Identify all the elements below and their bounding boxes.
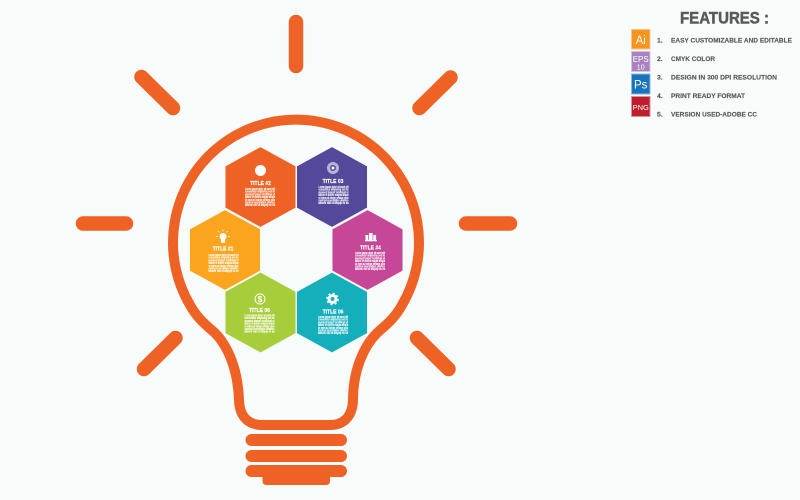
text block: title 6 teal: nostrud exercitation ullamco	[318, 328, 348, 332]
text block: title 3: nostrud exercitation ullamco	[318, 198, 348, 202]
text block: title 6 teal: eiusmod tempor incididunt ut	[318, 320, 349, 324]
text block: title 6 teal	[318, 315, 349, 335]
text block: title 4: Lorem ipsum dolor sit amet elit	[355, 251, 386, 255]
hexagon: title 3	[296, 146, 368, 228]
icon: Ai badge: Ai	[636, 35, 646, 47]
icon: Ps badge	[632, 74, 650, 94]
hexagon: title 6 teal	[296, 272, 368, 353]
heading: title 6 teal: TITLE 06	[323, 310, 344, 316]
item 5: VERSION USED-ADOBE CC	[671, 112, 757, 118]
text block: title 3: ut enim ad minim veniam quis	[318, 196, 349, 200]
icon: PNG badge	[632, 96, 650, 116]
hexagon: title 4	[332, 210, 403, 290]
text block: title 2: eiusmod tempor incididunt ut	[245, 192, 276, 196]
icon: Ai badge	[632, 30, 650, 49]
text block: title 6 green: ut enim ad minim veniam quis	[244, 324, 275, 328]
text block: title 3: laboris nisi ut aliquip ex ea	[318, 201, 349, 205]
item 2: CMYK COLOR	[671, 56, 715, 63]
text block: title 6 green: eiusmod tempor incididunt ut	[244, 319, 275, 323]
heading: title 1: TITLE #1	[213, 246, 234, 252]
text block: title 4	[355, 251, 386, 271]
text block: title 2: consectetur adipiscing sed do	[245, 190, 275, 194]
icon: clock	[255, 165, 266, 176]
text block: title 3: Lorem ipsum dolor sit amet elit	[318, 185, 349, 189]
text block: title 1: nostrud exercitation ullamco	[208, 266, 238, 270]
text block: title 1: laboris nisi ut aliquip ex ea	[208, 269, 239, 273]
text block: title 6 green: nostrud exercitation ullamco	[244, 327, 274, 331]
text block: title 6 teal: laboris nisi ut aliquip ex ea	[318, 331, 348, 335]
item 3: 3.	[657, 74, 663, 82]
text block: title 6 green: laboris nisi ut aliquip ex ea	[244, 330, 275, 334]
text block: title 3: consectetur adipiscing sed do	[318, 188, 348, 192]
hexagon: title 1	[190, 210, 260, 290]
icon: EPS badge: 10	[637, 64, 645, 72]
text block: title 3: labore et dolore magna aliqua	[318, 193, 349, 197]
icon: light bulb	[216, 230, 230, 243]
item 4: PRINT READY FORMAT	[671, 93, 746, 100]
icon: Ps badge: Ps	[634, 80, 648, 92]
features list	[657, 38, 792, 118]
text block: title 6 teal: consectetur adipiscing sed do	[318, 318, 348, 322]
light bulb outline	[173, 120, 419, 425]
text block: title 4: consectetur adipiscing sed do	[355, 254, 385, 258]
text block: title 2: laboris nisi ut aliquip ex ea	[245, 203, 275, 207]
heading: title 6 green: TITLE 06	[249, 308, 270, 314]
item 5: 5.	[657, 112, 663, 118]
item 4: 4.	[657, 93, 663, 100]
text block: title 2: nostrud exercitation ullamco	[245, 200, 275, 204]
text block: title 3	[318, 185, 349, 205]
item 1: EASY CUSTOMIZABLE AND EDITABLE	[671, 38, 792, 44]
icon: PNG badge: PNG	[633, 103, 649, 112]
text block: title 1: eiusmod tempor incididunt ut	[208, 258, 239, 262]
hexagon: title 2	[225, 146, 296, 228]
features heading: FEATURES :	[680, 10, 769, 28]
icon: bar chart	[365, 233, 377, 241]
text block: title 1	[208, 253, 239, 273]
heading: title 4: TITLE #4	[360, 246, 381, 252]
text block: title 6 teal: labore et dolore magna aliqua	[318, 323, 348, 327]
item 2: 2.	[657, 56, 663, 63]
icon: dollar coin: $	[258, 295, 263, 304]
text block: title 6 green: consectetur adipiscing sed do	[244, 316, 274, 320]
text block: title 6 teal: ut enim ad minim veniam quis	[318, 326, 348, 330]
heading: title 2: TITLE #2	[250, 181, 271, 187]
text block: title 1: consectetur adipiscing sed do	[208, 256, 238, 260]
icon: EPS badge	[632, 52, 650, 72]
text block: title 6 green: labore et dolore magna aliqua	[244, 322, 275, 326]
text block: title 6 green: Lorem ipsum dolor sit amet elit	[244, 314, 275, 318]
text block: title 4: labore et dolore magna aliqua	[355, 259, 385, 263]
text block: title 2: Lorem ipsum dolor sit amet elit	[245, 187, 276, 191]
item 3: DESIGN IN 300 DPI RESOLUTION	[671, 74, 777, 82]
text block: title 4: eiusmod tempor incididunt ut	[355, 256, 386, 260]
text block: title 4: laboris nisi ut aliquip ex ea	[355, 267, 385, 271]
text block: title 2: ut enim ad minim veniam quis	[245, 198, 275, 202]
text block: title 4: nostrud exercitation ullamco	[355, 264, 385, 268]
heading: title 3: TITLE 03	[323, 179, 344, 185]
text block: title 1: labore et dolore magna aliqua	[208, 261, 239, 265]
text block: title 2: labore et dolore magna aliqua	[245, 195, 275, 199]
text block: title 1: Lorem ipsum dolor sit amet elit	[208, 253, 239, 257]
text block: title 6 green	[244, 314, 275, 334]
icon: EPS badge: EPS	[633, 55, 649, 64]
text block: title 2	[245, 187, 276, 207]
text block: title 6 teal: Lorem ipsum dolor sit amet elit	[318, 315, 349, 319]
hexagon: title 6 green	[225, 272, 296, 353]
text block: title 1: ut enim ad minim veniam quis	[208, 264, 239, 268]
text block: title 3: eiusmod tempor incididunt ut	[318, 190, 349, 194]
bulb screw base	[246, 434, 347, 485]
text block: title 4: ut enim ad minim veniam quis	[355, 262, 385, 266]
icon: gear	[327, 293, 338, 305]
item 1: 1.	[657, 38, 663, 44]
light rays	[83, 22, 510, 369]
icon: target	[328, 164, 338, 172]
